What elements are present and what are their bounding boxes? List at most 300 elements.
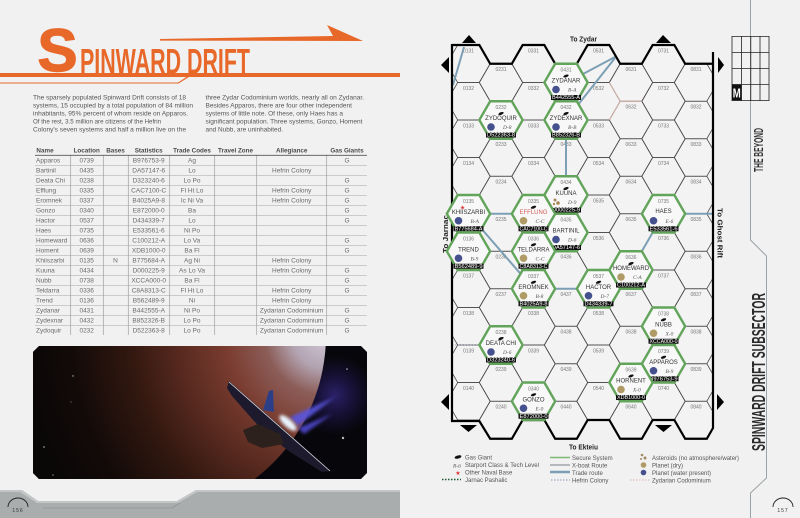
- table rows: 0135: [79, 258, 94, 264]
- system: Zydoquir: [479, 101, 523, 139]
- system: Hornent: XDB1000-0: [617, 395, 645, 401]
- hex numbers: 0134: [463, 161, 474, 167]
- hex numbers: 0231: [495, 67, 507, 73]
- hex numbers: 0831: [690, 67, 702, 73]
- system: Gonzo: [512, 382, 555, 420]
- system: Kuuna: KUUNA: [555, 191, 577, 197]
- system: Hornent: HORNENT: [616, 378, 646, 384]
- table rows: Zydarian Codominium: [260, 318, 323, 324]
- table rows: Lo: [188, 218, 196, 224]
- system: Homeward: HOMEWARD: [613, 266, 650, 272]
- system: Apparos: B-9: [666, 369, 674, 375]
- hex numbers: 0536: [593, 236, 604, 242]
- table header: Allegiance: [276, 148, 308, 154]
- table rows: Nubb: [36, 278, 52, 284]
- system: Kuuna: [544, 176, 588, 214]
- table rows: G: [344, 288, 350, 294]
- intro text: right column: systems of little note. Of these, only Haes has a: [206, 110, 343, 118]
- hex numbers: 0634: [625, 180, 637, 186]
- system: Kuuna: 0434: [560, 180, 572, 186]
- table rows: Homent: [36, 248, 59, 254]
- system: Zydoquir: D522363-8: [487, 133, 515, 139]
- table header: Location: [74, 148, 100, 154]
- hex numbers: 0637: [625, 292, 637, 298]
- hex numbers: 0440: [560, 404, 572, 410]
- hex numbers: 0133: [463, 124, 474, 130]
- table rows: G: [344, 218, 350, 224]
- table rows: Gonzo: [36, 208, 56, 214]
- title arrow: [160, 25, 363, 41]
- direction label: To Ghost Rift: To Ghost Rift: [716, 208, 724, 259]
- table rows: Kuuna: [36, 268, 55, 274]
- table rows: G: [344, 328, 350, 334]
- system: Bartinil: D-6: [567, 238, 577, 244]
- system: Zydanar: B-A: [568, 88, 577, 94]
- table rows: E533561-6: [133, 228, 165, 234]
- table rows: B852326-B: [132, 318, 165, 324]
- system: Deata Chi: DEATA CHI: [486, 341, 517, 347]
- hex numbers: 0733: [658, 124, 669, 130]
- system: Bartinil: BARTINIL: [553, 228, 580, 234]
- page number 156: [8, 498, 28, 514]
- hex numbers: 0131: [463, 48, 474, 54]
- hex numbers: 0237: [495, 292, 507, 298]
- table rows: Ag: [188, 158, 196, 164]
- table rows: G: [344, 188, 350, 194]
- system: Trend: TREND: [458, 247, 479, 253]
- table rows: 0738: [79, 278, 94, 284]
- legend: naval base: Other Naval Base: [465, 470, 513, 476]
- table rows: D323240-6: [133, 178, 165, 184]
- legend: planet water: [641, 470, 711, 477]
- direction label: To Zydar: To Zydar: [570, 34, 597, 44]
- table rows: Lo Po: [184, 178, 201, 184]
- table rows: E872000-0: [133, 208, 165, 214]
- system: Haes: E-6: [664, 219, 674, 225]
- hex numbers: 0239: [495, 367, 507, 373]
- table rows: Lo Va: [184, 238, 201, 244]
- system: Zydoquir: D-8: [502, 125, 512, 131]
- hex numbers: 0236: [495, 254, 507, 260]
- legend: planet water: Planet (water present): [652, 471, 711, 477]
- legend: planet dry: [641, 462, 683, 470]
- table rows: Zydoquir: [36, 328, 62, 334]
- intro text: left column: systems, 15 occupied by a total population of 84 million: [33, 102, 193, 110]
- hex numbers: 0535: [593, 198, 604, 204]
- system: Efflung: C-C: [536, 219, 545, 225]
- hex numbers: 0838: [690, 330, 702, 336]
- legend: planet dry: Planet (dry): [652, 464, 683, 470]
- legend: Hefrin colony: [551, 478, 608, 484]
- intro text: right column: and Nubb, are uninhabited.: [206, 126, 283, 134]
- page number 156: 156: [12, 508, 24, 514]
- table rows: G: [344, 268, 350, 274]
- legend: x-boat route: [550, 464, 608, 470]
- system: Zydanar: 0431: [560, 68, 572, 74]
- legend: secure system: Secure System: [572, 456, 613, 462]
- legend: Jarnac Pashalic: Jarnac Pashalic: [465, 478, 507, 484]
- table header: Travel Zone: [218, 148, 253, 154]
- hex numbers: 0834: [690, 180, 702, 186]
- table rows: G: [344, 158, 350, 164]
- table rows: CAC7100-C: [131, 188, 167, 194]
- system: Apparos: B976753-9: [650, 376, 678, 382]
- table rows: D434339-7: [133, 218, 165, 224]
- table rows: Ba Fl: [184, 278, 200, 284]
- system: Hornent: X-0: [632, 388, 641, 394]
- hex numbers: 0235: [495, 217, 507, 223]
- hex numbers: 0137: [463, 274, 474, 280]
- intro text: left column: Of the rest, 3.5 million are citizens of the Hefrin: [33, 118, 161, 126]
- table header: Trade Codes: [173, 148, 211, 154]
- system: Apparos: APPAROS: [649, 360, 678, 366]
- table rows: Zydarian Codominium: [260, 328, 323, 334]
- table rows: D522363-8: [133, 328, 165, 334]
- system: Bartinil: 0435: [560, 218, 572, 224]
- system: Gonzo: E872000-0: [520, 414, 548, 420]
- table rows: Zydarian Codominium: [260, 308, 323, 314]
- system: Hactor: [577, 270, 620, 308]
- table header: Gas Giants: [330, 148, 364, 154]
- system: Haes: HAES: [655, 209, 672, 215]
- legend: [442, 454, 739, 484]
- table rows: D000225-9: [133, 268, 165, 274]
- system: Khiiszarbi: KHIISZARBI: [452, 210, 486, 216]
- table rows: Zydanar: [36, 308, 61, 314]
- table header: Bases: [106, 148, 125, 154]
- system: Efflung: EFFLUNG: [519, 210, 548, 216]
- hex numbers: 0240: [495, 404, 507, 410]
- table rows: Ni Po: [184, 228, 200, 234]
- label: Spinward Drift Subsector: SPINWARD DRIFT SUBSECTOR: [749, 293, 769, 451]
- table rows: Hefrin Colony: [272, 298, 312, 304]
- table rows: N: [113, 258, 118, 264]
- table rows: 0636: [79, 238, 94, 244]
- system: Deata Chi: D323240-6: [487, 358, 515, 364]
- table rows: Hefrin Colony: [272, 168, 312, 174]
- table rows: As Lo Va: [179, 268, 205, 274]
- system: Zydoquir: 0232: [495, 105, 507, 111]
- system: Teldarra: C8A8313-C: [520, 264, 548, 270]
- direction label: To Jarnac: To Jarnac: [441, 215, 450, 253]
- hex numbers: 0638: [625, 330, 637, 336]
- hex numbers: 0532: [593, 86, 604, 92]
- hex numbers: 0640: [625, 404, 637, 410]
- table rows: Hefrin Colony: [272, 198, 312, 204]
- hex numbers: 0437: [560, 292, 572, 298]
- table rows: 0340: [79, 208, 94, 214]
- table rows: Ic Ni Va: [181, 198, 204, 204]
- system: Hactor: D-7: [600, 294, 609, 300]
- system: Zydexnar: ZYDEXNAR: [550, 116, 583, 122]
- hex numbers: 0138: [463, 311, 474, 317]
- illustration: starship over planet: [33, 346, 367, 479]
- legend: gas giant: Gas Giant: [465, 456, 492, 462]
- table rows: DA57147-6: [132, 168, 166, 174]
- intro text: left column: The sparsely populated Spinward Drift consists of 18: [33, 94, 186, 102]
- hex numbers: 0539: [593, 348, 604, 354]
- system: Trend: [447, 232, 490, 270]
- system: Deata Chi: D-6: [502, 350, 512, 356]
- legend: naval base: ★: [455, 470, 461, 477]
- table rows: Ni Po: [184, 308, 200, 314]
- table rows: 0434: [79, 268, 94, 274]
- table rows: G: [344, 278, 350, 284]
- system: Zydexnar: B-B: [568, 125, 577, 131]
- system: Zydexnar: B852326-B: [552, 133, 581, 139]
- table rows: 0639: [79, 248, 94, 254]
- system: Zydanar: ZYDANAR: [552, 78, 581, 84]
- system: Eromnek: B4025A9-8: [519, 301, 548, 307]
- hex numbers: 0732: [658, 86, 669, 92]
- system: Zydanar: B442555-A: [552, 95, 581, 101]
- table rows: 0232: [79, 328, 94, 334]
- table rows: Lo: [188, 168, 196, 174]
- system: Kuuna: D000225-9: [552, 208, 580, 214]
- intro text: left column: inhabitants, 95% percent of whom reside on Apparos.: [33, 110, 188, 118]
- hex numbers: 0331: [528, 48, 539, 54]
- hex numbers: 0132: [463, 86, 474, 92]
- system: Hactor: D434339-7: [585, 301, 613, 307]
- hex numbers: 0633: [625, 142, 637, 148]
- table rows: Deata Chi: [36, 178, 65, 184]
- intro text: right column: three Zydar Codominium worlds, nearly all on Zydanar.: [206, 94, 364, 102]
- system: Trend: B-9: [470, 256, 479, 262]
- hex numbers: 0233: [495, 142, 507, 148]
- table rows: Lo Po: [184, 328, 201, 334]
- table rows: Ba Fl: [184, 248, 200, 254]
- system: Gonzo: GONZO: [522, 397, 545, 403]
- system: Teldarra: TELDARRA: [517, 247, 550, 253]
- legend: gas giant: [454, 455, 492, 462]
- table rows: Khiiszarbi: [36, 258, 64, 264]
- hex numbers: 0837: [690, 292, 702, 298]
- table rows: 0336: [79, 288, 94, 294]
- system: Hornent: 0639: [625, 368, 637, 374]
- system: Hactor: HACTOR: [586, 285, 612, 291]
- hex numbers: 0334: [528, 161, 539, 167]
- table rows: Hefrin Colony: [272, 268, 312, 274]
- table rows: 0335: [79, 188, 94, 194]
- system: Deata Chi: [479, 326, 523, 364]
- system: Nubb: 0738: [658, 311, 669, 317]
- legend: asteroids: [640, 454, 739, 462]
- hex numbers: 0840: [690, 404, 702, 410]
- legend: x-boat route: X-boat Route: [572, 464, 608, 470]
- direction label: To Ekteiu: To Ekteiu: [569, 442, 598, 452]
- footer band: left page: [0, 490, 400, 518]
- hex numbers: 0339: [528, 348, 539, 354]
- table rows: G: [344, 238, 350, 244]
- system: Homeward: C100212-A: [617, 283, 646, 289]
- system: Khiiszarbi: 0135: [463, 199, 474, 205]
- system: Nubb: X-0: [664, 331, 674, 337]
- table rows: Trend: [36, 298, 53, 304]
- table rows: 0337: [79, 198, 94, 204]
- system: Teldarra: 0336: [528, 236, 539, 242]
- table rows: G: [344, 308, 350, 314]
- hex numbers: 0835: [690, 217, 702, 223]
- hex numbers: 0839: [690, 367, 702, 373]
- table rows: G: [344, 248, 350, 254]
- hex map: subsector: [441, 34, 724, 452]
- hex numbers: 0439: [560, 367, 572, 373]
- hex numbers: 0139: [463, 348, 474, 354]
- system: Khiiszarbi: B775684-A: [454, 226, 483, 232]
- table rows: 0739: [79, 158, 94, 164]
- table rows: B562489-9: [133, 298, 165, 304]
- table rows: Ba: [188, 208, 196, 214]
- Zydarian border: [609, 82, 642, 120]
- system: Zydanar: [544, 64, 588, 101]
- right edge rule: [750, 0, 766, 518]
- hex numbers: 0533: [593, 124, 604, 130]
- table rows: B775684-A: [132, 258, 166, 264]
- table header: Name: [36, 148, 54, 154]
- table rows: XCCA000-0: [131, 278, 166, 284]
- table header: [36, 148, 364, 154]
- table rows: Zydexnar: [36, 318, 64, 324]
- system: Teldarra: [512, 232, 555, 270]
- system: Haes: E533561-6: [650, 226, 678, 232]
- legend: Zydarian Codominium: Zydarian Codominium: [652, 478, 711, 484]
- trade routes: [453, 47, 713, 289]
- system: Zydoquir: ZYDOQUIR: [485, 116, 517, 122]
- table rows: XDB1000-0: [132, 248, 166, 254]
- table rows: G: [344, 198, 350, 204]
- system: Zydexnar: 0432: [560, 105, 572, 111]
- hex numbers: 0731: [658, 48, 669, 54]
- title initial: S: [38, 17, 78, 84]
- table rows: Hefrin Colony: [272, 258, 312, 264]
- system: Gonzo: 0340: [528, 386, 539, 392]
- hex numbers: 0737: [658, 274, 669, 280]
- hex numbers: 0531: [593, 48, 604, 54]
- table rows: G: [344, 208, 350, 214]
- table rows: Hactor: [36, 218, 56, 224]
- hex numbers: 0140: [463, 386, 474, 392]
- hex numbers: 0734: [658, 161, 669, 167]
- table rows: 0431: [79, 308, 94, 314]
- system: Khiiszarbi: B-A: [470, 219, 480, 225]
- table rows: C100212-A: [132, 238, 166, 244]
- outer border: [452, 44, 713, 439]
- table rows: [36, 158, 350, 334]
- legend: secure system: [550, 456, 613, 462]
- title rule: [0, 73, 400, 84]
- system: Haes: [642, 195, 685, 232]
- hex numbers: 0832: [690, 104, 702, 110]
- hex numbers: 0635: [625, 217, 637, 223]
- hex numbers: 0436: [560, 254, 572, 260]
- table rows: Efflung: [36, 188, 57, 194]
- table rows: 0136: [79, 298, 94, 304]
- legend: starport class: Starport Class & Tech Level: [465, 463, 539, 469]
- system: Hornent: [609, 364, 653, 401]
- legend: Jarnac Pashalic: [442, 478, 507, 484]
- legend: Hefrin colony: Hefrin Colony: [572, 478, 608, 484]
- starship: [227, 381, 335, 472]
- table rows: B976753-9: [133, 158, 165, 164]
- table rows: Fl Ht Lo: [181, 288, 204, 294]
- hex numbers: 0332: [528, 86, 539, 92]
- table rows: B4025A9-8: [132, 198, 165, 204]
- hex numbers: 0338: [528, 311, 539, 317]
- system: Homeward: C-A: [633, 275, 642, 281]
- system: Khiiszarbi: [447, 195, 490, 232]
- sector locator grid: M: [733, 86, 741, 100]
- table rows: 0432: [79, 318, 94, 324]
- intro text: left column: [33, 94, 193, 134]
- system: Nubb: XCCA000-0: [650, 339, 678, 345]
- title: Spinward Drift: [0, 17, 400, 84]
- table rows: Eromnek: [36, 198, 63, 204]
- system: Haes: 0735: [658, 199, 669, 205]
- table rows: 0537: [79, 218, 94, 224]
- system: Eromnek: EROMNEK: [518, 285, 549, 291]
- system: Nubb: NUBB: [655, 322, 672, 328]
- intro text: right column: significant population. Three systems, Gonzo, Homent: [206, 118, 363, 126]
- system: Eromnek: 0337: [528, 274, 539, 280]
- system: Trend: B562489-9: [455, 264, 483, 270]
- system: Homeward: 0636: [625, 255, 637, 261]
- intro text: left column: Colony's seven systems and half a million live on the: [33, 126, 186, 134]
- system: Eromnek: B-8: [536, 294, 544, 300]
- legend: asteroids: Asteroids (no atmosphere/water): [652, 456, 739, 462]
- hex numbers: 0740: [658, 386, 669, 392]
- intro text: right column: [206, 94, 364, 134]
- system: Homeward: [609, 251, 653, 289]
- table rows: Teldarra: [36, 288, 60, 294]
- hex numbers: 0836: [690, 254, 702, 260]
- system: Gonzo: E-0: [534, 406, 544, 412]
- hex numbers: 0540: [593, 386, 604, 392]
- system: Hactor: 0537: [593, 274, 604, 280]
- table rows: G: [344, 318, 350, 324]
- table rows: Hefrin Colony: [272, 188, 312, 194]
- system: Apparos: [642, 345, 685, 382]
- table rows: Hefrin Colony: [272, 288, 312, 294]
- system: Khiiszarbi: ★: [460, 204, 465, 211]
- table rows: Apparos: [36, 158, 61, 164]
- hex numbers: 0234: [495, 180, 507, 186]
- legend: starport class: B-6: [453, 463, 461, 469]
- direction arrows: [441, 35, 724, 432]
- system: Deata Chi: 0238: [495, 330, 507, 336]
- table rows: G: [344, 178, 350, 184]
- table rows: C8A8313-C: [132, 288, 166, 294]
- intro text: right column: Besides Apparos, there are four other independent: [206, 102, 352, 110]
- system: Bartinil: [544, 214, 588, 251]
- table rows: 0238: [79, 178, 94, 184]
- hex numbers: 0333: [528, 124, 539, 130]
- system: Apparos: 0739: [658, 349, 669, 355]
- legend: trade route: Trade route: [572, 471, 603, 477]
- system: Trend: 0136: [463, 236, 474, 242]
- table: system data: [35, 148, 367, 335]
- table rows: Bartinil: [36, 168, 56, 174]
- hex numbers: 0833: [690, 142, 702, 148]
- system: Teldarra: C-C: [536, 256, 545, 262]
- table rows: Homeward: [36, 238, 68, 244]
- system: Efflung: CAC7100-C: [520, 226, 548, 232]
- legend: trade route: [550, 471, 603, 477]
- system: Nubb: [642, 308, 685, 345]
- table rows: Lo Po: [184, 318, 201, 324]
- Hefrin colony border: [453, 344, 478, 346]
- hex numbers: 0736: [658, 236, 669, 242]
- hex numbers: 0632: [625, 104, 637, 110]
